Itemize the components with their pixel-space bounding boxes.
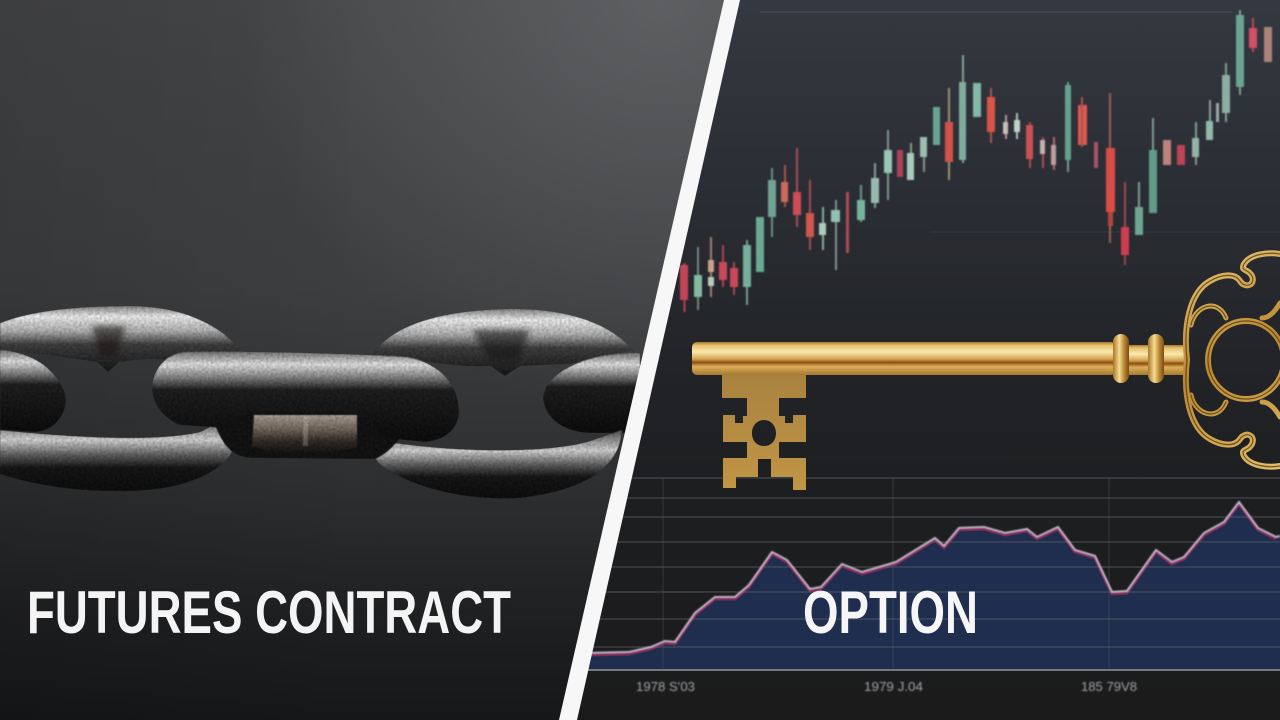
heading: futures contract: FUTURES CONTRACT [27, 579, 511, 646]
candlestick chart [680, 10, 1272, 312]
right link bottom [374, 430, 622, 498]
right link seam [472, 330, 530, 360]
grid lines [580, 478, 1280, 670]
icon: metal chain [0, 306, 640, 498]
center rust segment [252, 415, 357, 453]
left link seam [92, 326, 126, 356]
icon: golden key [692, 253, 1280, 490]
panel: futures contract background [0, 0, 740, 720]
key bow filigree [1186, 253, 1280, 467]
key shaft [692, 334, 1186, 383]
left end link [0, 350, 66, 432]
axis labels: 1978 S'03 [636, 679, 695, 694]
right end link [543, 353, 640, 433]
divider: white slanted bar [559, 0, 740, 720]
axis labels: 1979 J.04 [864, 679, 923, 694]
key bit [722, 375, 806, 490]
center rear link shadow [216, 412, 399, 460]
left link top [0, 306, 242, 372]
area chart [580, 478, 1280, 670]
axis labels: 185 79V8 [1081, 679, 1137, 694]
heading: option: OPTION [803, 579, 978, 646]
axis labels [636, 681, 1138, 692]
center front link [152, 352, 459, 442]
left link bottom [0, 426, 232, 491]
panel: option background [550, 0, 1280, 720]
right link top [372, 309, 636, 376]
